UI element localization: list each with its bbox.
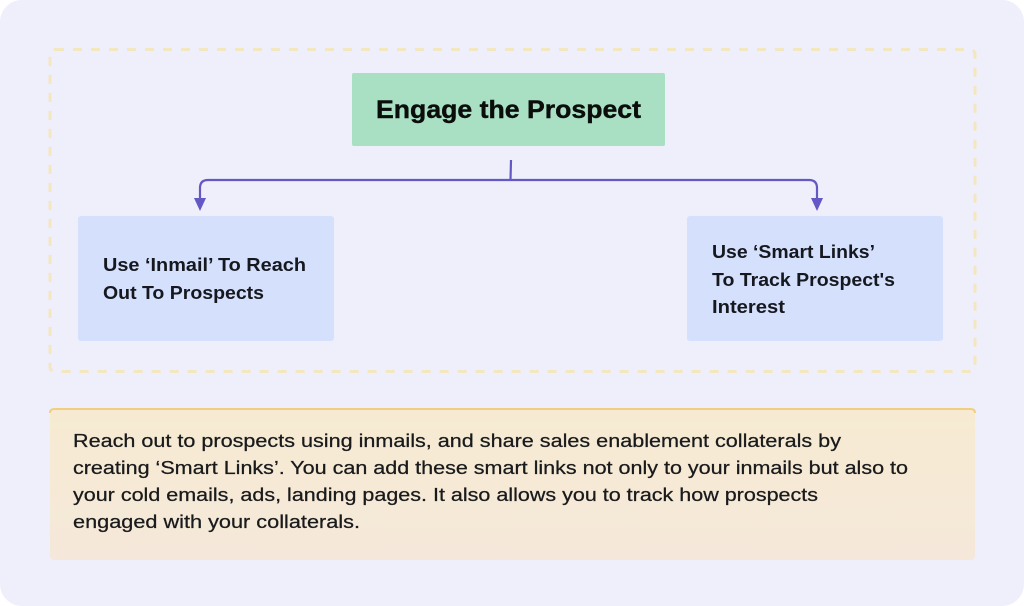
callout: description: engaged with your collaterals. bbox=[73, 511, 360, 532]
panel: use Smart Links bbox=[687, 216, 943, 341]
arrow: branching connector to both boxes bbox=[194, 160, 823, 211]
panel: use Inmail: Use ‘Inmail’ To Reach bbox=[103, 255, 306, 275]
callout: description: Reach out to prospects using inmails, and share sales enablement collaterals by bbox=[73, 430, 842, 451]
panel: use Smart Links: Interest bbox=[712, 297, 785, 317]
panel: use Smart Links: Use ‘Smart Links’ bbox=[712, 242, 875, 262]
panel: use Inmail: Out To Prospects bbox=[103, 283, 264, 303]
callout: description: creating ‘Smart Links’. You can add these smart links not only to your inmails but also to bbox=[73, 457, 908, 478]
callout: description bbox=[50, 409, 975, 560]
dashed frame bbox=[50, 50, 975, 372]
heading box: Engage the Prospect bbox=[352, 73, 665, 146]
callout: description: your cold emails, ads, landing pages. It also allows you to track how prospects bbox=[73, 484, 818, 505]
panel: use Inmail bbox=[78, 216, 334, 341]
panel: use Smart Links: To Track Prospect's bbox=[712, 270, 895, 290]
heading box: Engage the Prospect: Engage the Prospect bbox=[376, 96, 642, 124]
